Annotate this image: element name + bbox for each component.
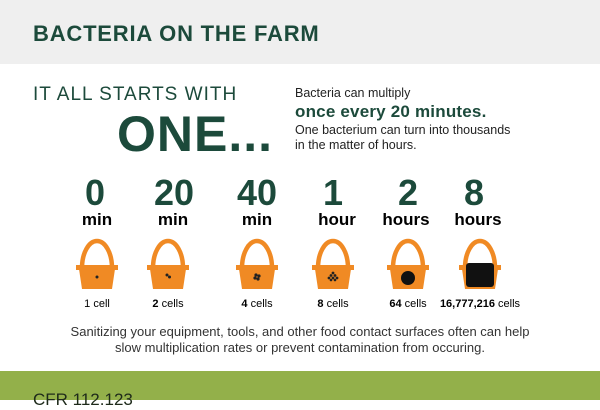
timeline labels: hour <box>318 210 356 229</box>
timeline labels: min <box>82 210 112 229</box>
text block: multiply explanation: in the matter of hours. <box>295 138 417 152</box>
heading: it all starts with: IT ALL STARTS WITH <box>33 84 237 105</box>
cell count labels: 2 cells <box>152 298 184 310</box>
cell count labels <box>84 298 520 310</box>
timeline labels: min <box>242 210 272 229</box>
bucket 4 cells <box>236 241 278 289</box>
bucket 1 cell <box>76 241 118 289</box>
text block: multiply explanation: Bacteria can multiply <box>295 86 410 100</box>
text block: multiply explanation <box>295 86 510 152</box>
footer band <box>0 371 600 400</box>
timeline labels: hours <box>382 210 430 229</box>
timeline labels: 40 <box>237 172 277 213</box>
text block: multiply explanation: once every 20 minutes. <box>295 102 486 121</box>
timeline labels: 1 <box>323 172 343 213</box>
timeline labels: 2 <box>398 172 418 213</box>
bucket 64 cells <box>387 241 429 289</box>
title: BACTERIA ON THE FARM <box>33 21 320 46</box>
heading: ONE...: ONE... <box>117 106 273 162</box>
cell count labels: 4 cells <box>241 298 273 310</box>
text block: sanitizing advice: Sanitizing your equipment, tools, and other food contact surfaces often can help <box>71 324 529 339</box>
footer text: CFR 112.123 <box>33 390 133 409</box>
text block: sanitizing advice: slow multiplication rates or prevent contamination from occuring. <box>115 340 485 355</box>
timeline labels: 0 <box>85 172 105 213</box>
timeline labels: 20 <box>154 172 194 213</box>
cell count labels: 64 cells <box>389 298 427 310</box>
cell count labels: 1 cell <box>84 298 110 310</box>
header band <box>0 0 600 64</box>
cell count labels: 16,777,216 cells <box>440 298 520 310</box>
text block: multiply explanation: One bacterium can turn into thousands <box>295 123 510 137</box>
timeline labels: hours <box>454 210 502 229</box>
timeline labels: 8 <box>464 172 484 213</box>
bucket many cells <box>459 241 501 289</box>
text block: sanitizing advice <box>71 324 529 355</box>
cell count labels: 8 cells <box>317 298 349 310</box>
timeline labels <box>82 172 502 229</box>
bucket 8 cells <box>312 241 354 289</box>
buckets row <box>76 238 501 289</box>
bucket 2 cells <box>147 241 189 289</box>
timeline labels: min <box>158 210 188 229</box>
